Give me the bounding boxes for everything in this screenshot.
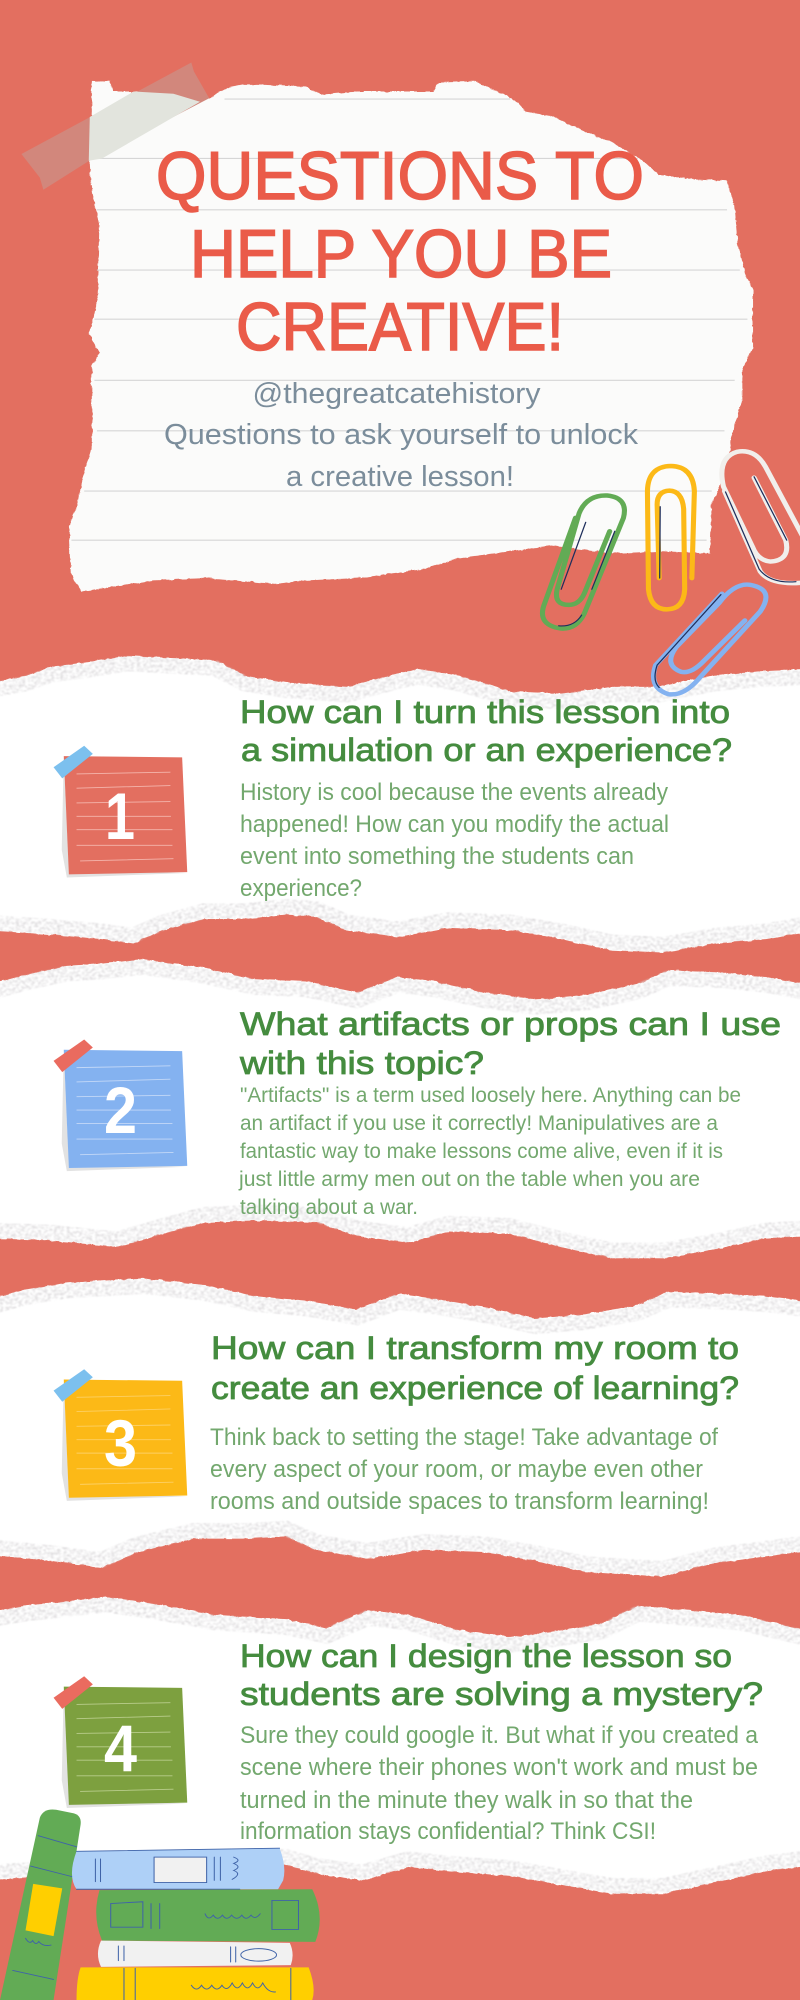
body text 4: scene where their phones won't work and must be: [240, 1754, 758, 1781]
heading 2: What artifacts or props can I use: [240, 1006, 781, 1042]
heading 4: How can I design the lesson so: [240, 1638, 732, 1674]
body text 3: rooms and outside spaces to transform learning!: [210, 1488, 709, 1515]
body text 2: fantastic way to make lessons come alive, even if it is: [240, 1139, 723, 1163]
white book: [98, 1941, 293, 1967]
blue book: [72, 1848, 284, 1889]
title: QUESTIONS TO: [156, 138, 644, 214]
heading 2: [239, 1006, 781, 1081]
body text 3: Think back to setting the stage! Take advantage of: [210, 1424, 718, 1451]
body text 3: [210, 1424, 718, 1515]
body text 2: talking about a war.: [240, 1195, 418, 1219]
body text 2: just little army men out on the table when you are: [238, 1167, 700, 1191]
subtitle: a creative lesson!: [286, 461, 514, 493]
heading 4: [240, 1638, 763, 1712]
title: [156, 138, 644, 365]
body text 4: Sure they could google it. But what if you created a: [240, 1722, 759, 1749]
sticky note 4: 4: [104, 1711, 137, 1785]
paperclips: [542, 451, 800, 694]
heading 3: [211, 1330, 739, 1406]
heading 3: How can I transform my room to: [211, 1330, 739, 1366]
sticky note 2: [54, 1039, 187, 1171]
sticky note 2: 2: [104, 1073, 137, 1147]
body text 1: [240, 779, 669, 902]
panel: question 4: [54, 1638, 763, 1845]
subtitle: [164, 378, 639, 493]
panel: torn notebook paper header: [21, 62, 753, 591]
sticky note 3: 3: [104, 1406, 137, 1480]
subtitle: Questions to ask yourself to unlock: [164, 419, 639, 451]
panel: question 2: [54, 1006, 781, 1219]
sticky note 1: 1: [105, 779, 135, 853]
icon: green paperclip: [542, 495, 624, 629]
sticky note 3: [54, 1369, 187, 1501]
green book: [96, 1889, 320, 1942]
body text 1: happened! How can you modify the actual: [240, 811, 669, 838]
torn white band 1: [0, 656, 800, 952]
body text 1: History is cool because the events already: [240, 779, 668, 806]
sticky note 1: [54, 746, 187, 877]
body text 4: information stays confidential? Think CSI!: [240, 1818, 656, 1845]
heading 4: students are solving a mystery?: [240, 1676, 763, 1712]
illustration: stack of books: [0, 1810, 320, 2000]
leaning green book: [0, 1810, 81, 2000]
heading 2: with this topic?: [239, 1045, 484, 1081]
title: CREATIVE!: [236, 289, 564, 365]
body text 1: experience?: [240, 875, 362, 902]
body text 1: event into something the students can: [240, 843, 634, 870]
body text 3: every aspect of your room, or maybe even other: [210, 1456, 703, 1483]
heading 3: create an experience of learning?: [211, 1370, 739, 1406]
torn lined paper sheet: [69, 80, 753, 591]
torn white band 2: [0, 959, 800, 1258]
body text 4: [240, 1722, 759, 1845]
torn white band 4: [0, 1597, 800, 1894]
heading 1: a simulation or an experience?: [241, 732, 732, 768]
title: HELP YOU BE: [190, 216, 612, 292]
body text 2: "Artifacts" is a term used loosely here. Anything can be: [240, 1083, 741, 1107]
panel: question 1: [54, 694, 732, 902]
body text 2: an artifact if you use it correctly! Manipulatives are a: [240, 1111, 718, 1135]
panel: question 3: [54, 1330, 739, 1515]
torn white band 3: [0, 1278, 800, 1577]
heading 1: How can I turn this lesson into: [240, 694, 730, 730]
body text 2: [238, 1083, 741, 1219]
body text 4: turned in the minute they walk in so that the: [240, 1787, 693, 1814]
subtitle: @thegreatcatehistory: [252, 378, 541, 410]
icon: blue paperclip: [654, 585, 766, 694]
icon: white paperclip: [722, 451, 800, 583]
heading 1: [240, 694, 732, 768]
sticky note 4: [54, 1676, 187, 1808]
yellow book: [77, 1967, 314, 2000]
washi tape: [21, 62, 209, 190]
icon: yellow paperclip: [647, 466, 694, 609]
